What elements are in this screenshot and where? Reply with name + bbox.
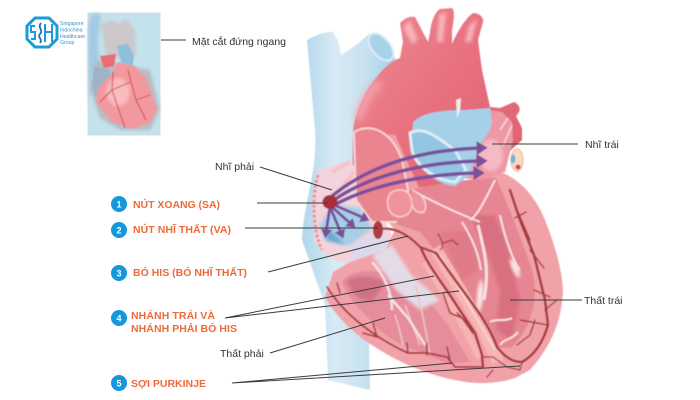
number badges <box>111 196 127 391</box>
panel: small heart thumbnail <box>88 13 160 135</box>
conduction system <box>327 190 557 377</box>
right atrium <box>312 160 394 262</box>
vena cava: superior and inferior <box>302 29 398 390</box>
numbered labels: NÚT XOANG (SA) <box>133 198 220 211</box>
logo: Singapore Indochina Healthcare Group: Group <box>60 40 75 46</box>
chordae and white strands <box>415 180 520 345</box>
aorta and pulmonary trunk, pink <box>352 8 522 190</box>
numbered labels: SỢI PURKINJE <box>131 378 206 390</box>
AV node <box>373 221 383 239</box>
number badges: 4 <box>116 314 122 324</box>
left bundle branch <box>421 248 483 367</box>
plain labels: Nhĩ trái <box>585 139 619 151</box>
numbered labels: NÚT NHĨ THẤT (VA) <box>133 223 231 236</box>
plain labels: Thất trái <box>584 295 623 307</box>
plain labels: Mặt cắt đứng ngang <box>192 35 286 48</box>
number badges: 3 <box>116 268 122 278</box>
numbered labels: NHÁNH PHẢI BÓ HIS <box>131 322 237 335</box>
ventricles <box>325 128 563 383</box>
SA node <box>322 195 338 209</box>
right ventricular outflow tract <box>354 128 408 222</box>
large heart illustration <box>302 8 563 390</box>
leader lines <box>161 40 582 383</box>
septum highlight <box>435 248 498 362</box>
purple arrows from SA node <box>326 148 480 233</box>
logo: Singapore Indochina Healthcare Group <box>27 18 85 47</box>
left atrium and pulmonary vein <box>462 110 523 180</box>
numbered labels: NHÁNH TRÁI VÀ <box>131 309 215 322</box>
right ventricle cavity <box>342 271 470 364</box>
numbered labels <box>131 198 247 390</box>
logo: Singapore Indochina Healthcare Group: Healthcare <box>60 34 85 40</box>
plain labels <box>192 35 623 360</box>
bundle of His <box>380 229 436 253</box>
valve cusps <box>388 190 412 217</box>
plain labels: Thất phải <box>220 348 264 360</box>
plain labels: Nhĩ phải <box>215 161 254 173</box>
number badges: 5 <box>116 378 122 388</box>
numbered labels: BÓ HIS (BÓ NHĨ THẤT) <box>133 266 247 279</box>
logo: Singapore Indochina Healthcare Group: Indochina <box>60 28 83 34</box>
upper interior of left ventricle <box>396 178 535 348</box>
left wall Purkinje <box>515 205 557 345</box>
lower wall Purkinje <box>327 287 483 367</box>
logo: Singapore Indochina Healthcare Group: Singapore <box>60 21 84 27</box>
number badges: 1 <box>116 200 122 210</box>
number badges: 2 <box>116 226 122 236</box>
pulmonary artery, blue <box>410 98 492 186</box>
